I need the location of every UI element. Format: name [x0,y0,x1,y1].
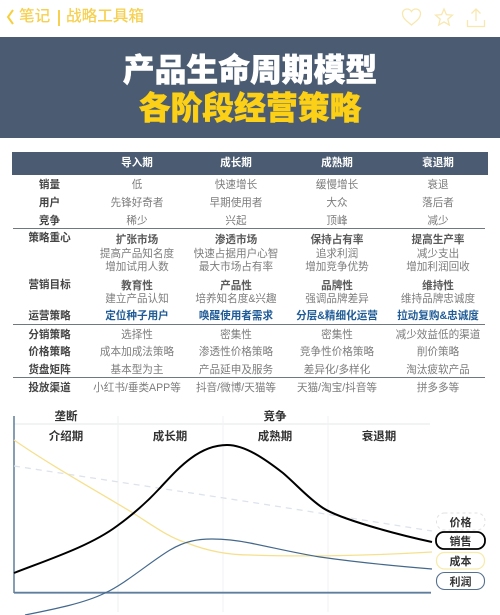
curve: profit [25,539,432,615]
table header row [0,152,500,175]
row: users: 早期使用者 [210,197,262,209]
row: sales: 销量 [39,179,60,191]
row: pricing strategy: 成本加成法策略 [100,346,174,358]
phase labels: 竞争 [264,409,287,423]
row: marketing goal: 产品性 [220,280,252,292]
icon: back chevron [6,9,14,25]
row: ad channels: 拼多多等 [417,382,459,394]
row: competition [39,214,449,227]
table header row: 成熟期 [321,157,353,169]
row: strategy focus: 减少支出 [417,248,459,260]
chart axes [14,416,431,593]
legend: profit: 利润 [450,574,472,588]
row: users: 落后者 [422,197,454,209]
title: subheading: 各阶段经营策略 [139,90,361,126]
row: distribution strategy: 选择性 [121,329,153,341]
curve: sales [14,445,432,573]
row: competition: 减少 [427,215,449,227]
row: pricing strategy: 渗透性价格策略 [199,346,273,358]
row: strategy focus: 最大市场占有率 [199,261,273,273]
row: ad channels: 抖音/微博/天猫等 [196,382,276,394]
row: marketing goal: 维持性 [422,280,454,292]
row: marketing goal: 维持品牌忠诚度 [401,293,475,305]
legend: profit [436,572,484,590]
row: pricing strategy: 竞争性价格策略 [300,346,374,358]
row: marketing goal: 强调品牌差异 [305,293,369,305]
row: product matrix: 基本型为主 [111,364,163,376]
row: distribution strategy: 密集性 [321,329,353,341]
phase labels: 垄断 [54,409,78,423]
row: product matrix [28,364,470,376]
row: users [39,196,454,209]
row: competition: 稀少 [126,215,148,227]
row: sales: 缓慢增长 [316,179,358,191]
phase labels: 成熟期 [258,429,292,443]
row: strategy focus: 提高生产率 [412,234,464,246]
row: marketing goal: 培养知名度&兴趣 [195,293,277,305]
row: pricing strategy [28,346,459,358]
row: distribution strategy: 密集性 [220,329,252,341]
row: distribution strategy: 分销策略 [28,329,71,341]
row: sales: 衰退 [427,179,449,191]
legend: sales [436,532,485,549]
row: users: 先锋好奇者 [111,197,163,209]
row: strategy focus: 增加利润回收 [406,261,470,273]
row: competition: 顶峰 [326,215,348,227]
icon: star [434,8,454,26]
row: operations strategy: 唤醒使用者需求 [199,310,273,322]
row: operations strategy: 定位种子用户 [105,310,169,322]
phase labels: 衰退期 [362,429,396,443]
row: distribution strategy [28,328,480,341]
row: product matrix: 淘汰疲软产品 [406,364,470,376]
row: strategy focus: 追求利润 [316,248,358,260]
title banner [0,37,500,138]
row: operations strategy: 分层&精细化运营 [296,310,378,322]
row: sales: 快速增长 [215,179,257,191]
row: strategy focus: 渗透市场 [215,234,257,246]
curve: cost [14,440,432,556]
phase labels: 介绍期 [49,429,83,443]
top navigation bar [6,8,486,28]
phase labels [49,409,396,443]
row: product matrix: 产品延申及服务 [199,364,273,376]
legend: sales: 销售 [450,534,472,548]
row: strategy focus: 保持占有率 [311,234,363,246]
curve: price [14,466,432,531]
row: operations strategy: 拉动复购&忠诚度 [397,310,479,322]
row: marketing goal: 建立产品认知 [105,293,169,305]
icon: heart [402,8,422,26]
row: strategy focus: 策略重心 [28,232,71,244]
row: ad channels: 小红书/垂类APP等 [93,382,181,394]
legend: cost [436,552,484,569]
row: sales [39,178,449,191]
row: marketing goal: 教育性 [121,280,153,292]
row: marketing goal: 品牌性 [321,280,353,292]
breadcrumb: notes: 笔记 [19,8,50,25]
breadcrumb: separator [58,10,60,26]
row: product matrix: 差异化/多样化 [304,364,370,376]
product lifecycle chart [13,409,486,615]
row: product matrix: 货盘矩阵 [28,364,71,376]
table header row: 成长期 [220,157,252,169]
title: main heading: 产品生命周期模型 [123,52,377,88]
row: distribution strategy: 减少效益低的渠道 [396,329,480,341]
row: competition: 竞争 [39,215,60,227]
table header row: 导入期 [121,157,153,169]
row: marketing goal: 营销目标 [28,279,71,291]
row: pricing strategy: 削价策略 [417,346,459,358]
row: strategy focus: 增加竞争优势 [305,261,369,273]
legend: price: 价格 [450,515,472,529]
row: pricing strategy: 价格策略 [28,346,71,358]
row: strategy focus: 扩张市场 [116,234,158,246]
phase labels: 成长期 [153,429,187,443]
row: strategy focus: 增加试用人数 [105,261,169,273]
row: marketing goal [28,278,475,305]
row: operations strategy: 运营策略 [28,310,71,322]
icon: share [466,8,486,28]
breadcrumb: toolbox: 战略工具箱 [66,8,144,25]
row: ad channels [28,382,459,394]
legend: cost: 成本 [450,554,472,568]
row: operations strategy [28,310,479,322]
row: competition: 兴起 [225,215,247,227]
row: strategy focus [28,232,470,273]
row: strategy focus: 快速占据用户心智 [194,248,278,260]
row: sales: 低 [132,179,142,191]
legend: price [436,513,485,530]
table header row: 衰退期 [422,157,454,169]
row: users: 大众 [326,197,348,209]
row: ad channels: 投放渠道 [28,382,71,394]
strategy table [12,152,488,394]
row: strategy focus: 提高产品知名度 [100,248,174,260]
row: users: 用户 [39,197,60,209]
row: ad channels: 天猫/淘宝/抖音等 [297,382,377,394]
